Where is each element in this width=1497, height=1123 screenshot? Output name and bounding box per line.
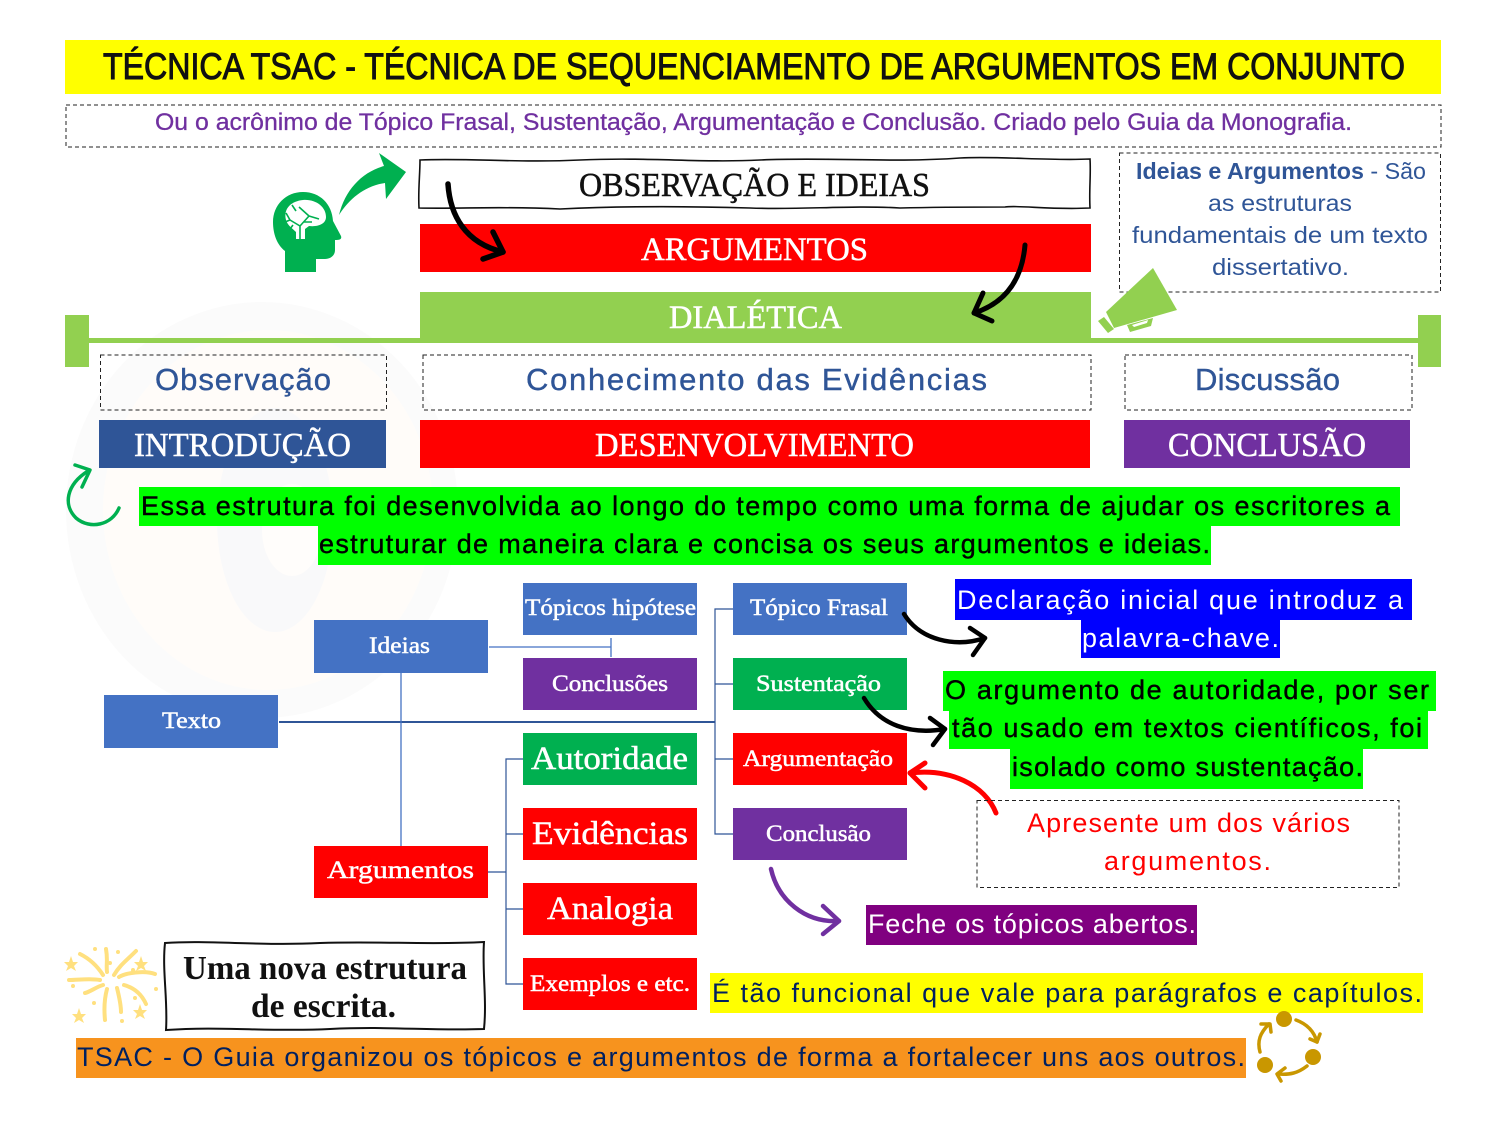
structure bar [65, 315, 1441, 367]
node: topico frasal: Tópico Frasal [750, 595, 888, 620]
label: discussao [1125, 355, 1412, 410]
label: conhecimento das evidencias: Conhecimento das Evidências [526, 362, 987, 397]
box: observacao e ideias [419, 158, 1090, 209]
highlighted text: TSAC summary: TSAC - O Guia organizou os tópicos e argumentos de forma a fortalecer uns aos outros. [77, 1042, 1245, 1072]
box: uma nova estrutura [164, 942, 485, 1030]
node: sustentacao [733, 658, 907, 710]
banner: argumentos [420, 224, 1091, 272]
highlighted text: authority argument: isolado como sustentação. [1012, 752, 1363, 782]
node: autoridade: Autoridade [531, 741, 688, 777]
highlighted text: topic sentence definition: Declaração inicial que introduz a [957, 585, 1404, 615]
node: exemplos e etc: Exemplos e etc. [530, 971, 690, 996]
banner: desenvolvimento [420, 420, 1090, 468]
node: ideias [314, 620, 488, 673]
banner: introducao: INTRODUÇÃO [134, 427, 351, 464]
node: sustentacao: Sustentação [756, 671, 881, 696]
highlighted text: structure history: Essa estrutura foi desenvolvida ao longo do tempo como uma forma de ajudar os escritores a [141, 491, 1391, 521]
banner: argumentos: ARGUMENTOS [641, 232, 868, 268]
node: analogia: Analogia [547, 891, 673, 927]
icon: curved green arrow [68, 465, 119, 525]
subtitle: Ou o acrônimo de Tópico Frasal, Sustentação, Argumentação e Conclusão. Criado pelo Guia da Monografia. [155, 109, 1352, 136]
subtitle [66, 105, 1441, 147]
node: autoridade [523, 733, 697, 785]
box: uma nova estrutura: de escrita. [251, 988, 396, 1025]
node: texto [104, 695, 278, 748]
label: observacao: Observação [155, 362, 331, 397]
icon: fireworks [64, 947, 158, 1023]
arrow: topico frasal to definition [904, 614, 985, 655]
banner: dialetica: DIALÉTICA [669, 299, 842, 336]
highlighted text: authority argument: O argumento de autoridade, por ser [945, 675, 1429, 705]
arrow: brain to observation [339, 153, 406, 215]
highlighted text: topic sentence definition: palavra-chave. [1082, 623, 1279, 653]
highlighted text: structure history: estruturar de maneira clara e concisa os seus argumentos e ideias. [319, 529, 1210, 559]
icon: head with brain [273, 192, 341, 272]
watermark logo [66, 302, 458, 718]
node: ideias: Ideias [369, 633, 430, 658]
note: ideias e argumentos: as estruturas [1208, 190, 1352, 216]
connector lines [279, 609, 733, 984]
node: topicos hipotese: Tópicos hipótese [525, 595, 696, 620]
arrow: red to argumentacao [910, 763, 996, 813]
node: exemplos e etc [523, 958, 697, 1010]
note: apresente um dos varios argumentos: Apresente um dos vários [1027, 808, 1350, 838]
box: observacao e ideias: OBSERVAÇÃO E IDEIAS [579, 167, 930, 204]
label: conhecimento das evidencias [423, 355, 1091, 410]
highlighted text: authority argument [943, 671, 1436, 789]
note: apresente um dos varios argumentos: argumentos. [1104, 846, 1271, 876]
node: topicos hipotese [523, 583, 697, 635]
node: conclusao: Conclusão [766, 821, 871, 846]
highlighted text: topic sentence definition [955, 579, 1412, 658]
banner: desenvolvimento: DESENVOLVIMENTO [595, 427, 914, 464]
label: observacao [100, 355, 386, 410]
box: uma nova estrutura: Uma nova estrutura [183, 950, 467, 987]
node: argumentos [314, 846, 488, 898]
node: conclusoes [523, 658, 697, 710]
note: ideias e argumentos: dissertativo. [1212, 254, 1349, 280]
node: texto: Texto [162, 708, 221, 733]
banner: conclusao: CONCLUSÃO [1168, 427, 1366, 464]
banner: conclusao [1124, 420, 1410, 468]
banner: introducao [99, 420, 386, 468]
node: evidencias: Evidências [532, 816, 688, 852]
node: argumentos: Argumentos [327, 857, 474, 884]
icon: cycle [1257, 1011, 1321, 1081]
note: ideias e argumentos: Ideias e Argumentos - São [1136, 158, 1426, 184]
node: conclusao [733, 808, 907, 860]
arrow: sustentacao to authority [864, 698, 945, 745]
label: discussao: Discussão [1195, 362, 1340, 397]
note: apresente um dos varios argumentos [977, 800, 1399, 888]
node: argumentacao: Argumentação [743, 746, 893, 771]
node: analogia [523, 883, 697, 935]
arrow: conclusao to closing note [771, 869, 839, 934]
banner: dialetica [420, 292, 1091, 343]
icon: megaphone [1098, 268, 1177, 333]
note: ideias e argumentos: fundamentais de um texto [1132, 222, 1428, 248]
node: conclusoes: Conclusões [552, 671, 668, 696]
highlighted text: feche os topicos: Feche os tópicos abertos. [868, 909, 1196, 939]
highlighted text: structure history [139, 487, 1400, 565]
node: evidencias [523, 808, 697, 860]
node: argumentacao [733, 733, 907, 785]
highlighted text: functional: É tão funcional que vale para parágrafos e capítulos. [712, 978, 1422, 1008]
highlighted text: authority argument: tão usado em textos científicos, foi [952, 713, 1422, 743]
arrow: arguments to dialectic [974, 245, 1025, 321]
arrow: observation to arguments [448, 184, 503, 259]
node: topico frasal [733, 583, 907, 635]
note: ideias e argumentos [1120, 153, 1440, 292]
